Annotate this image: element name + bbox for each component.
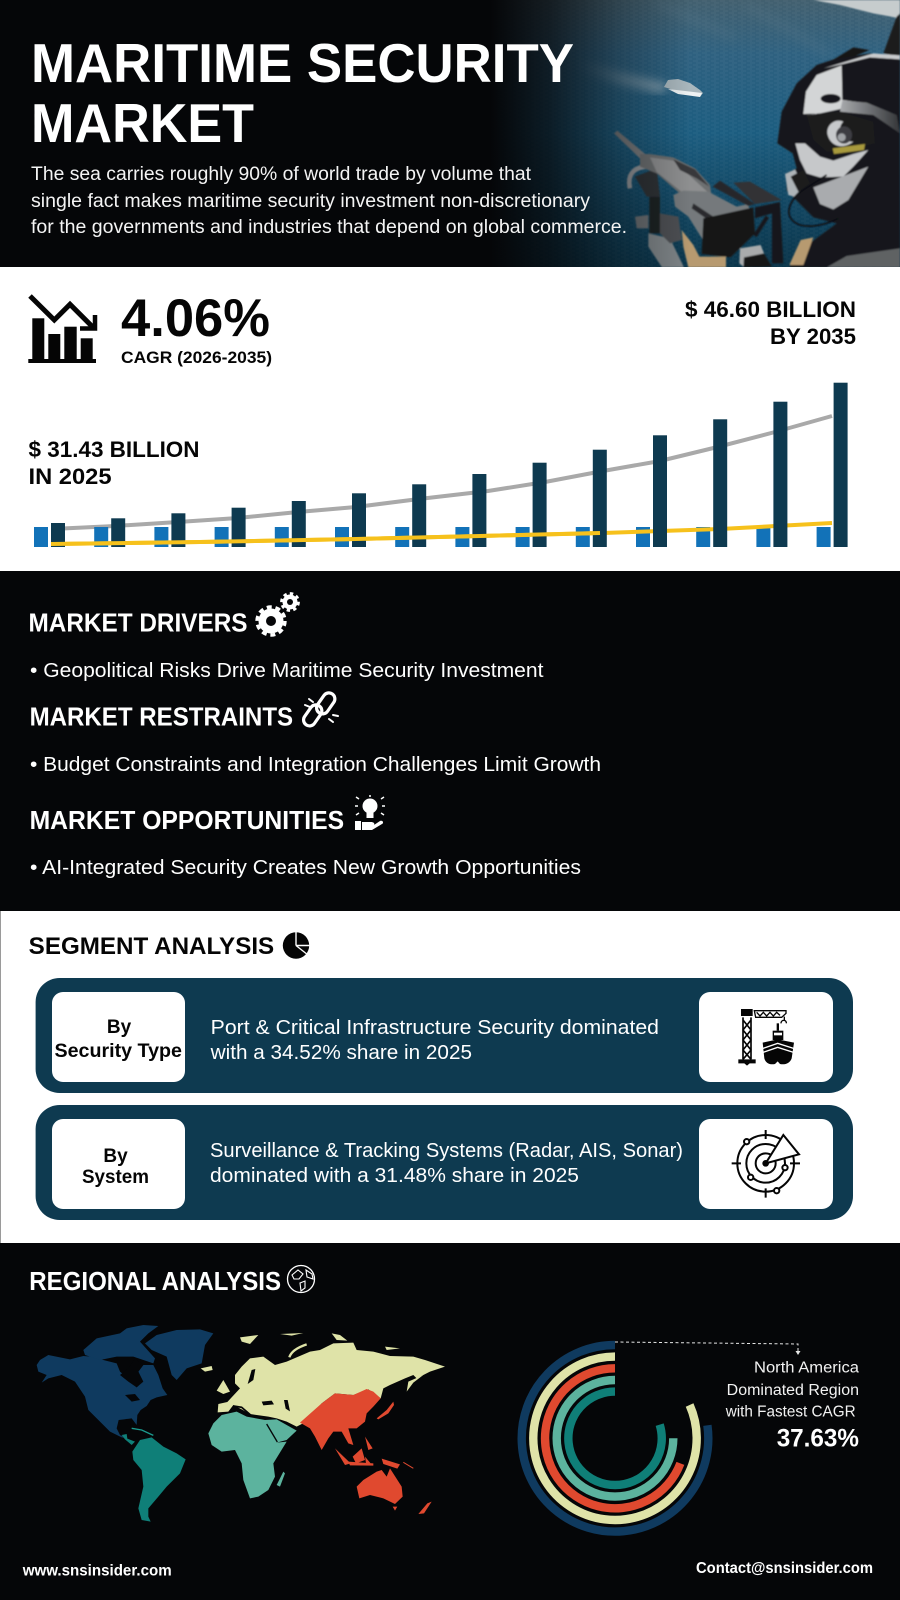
- icon: broken chain: [301, 691, 338, 728]
- icon: pie chart: [283, 931, 311, 959]
- callout: North America: with Fastest CAGR: [725, 1404, 856, 1421]
- callout: North America: Dominated Region: [727, 1382, 859, 1399]
- label box: By: [107, 1017, 132, 1038]
- forecast value: BY 2035: [770, 324, 856, 349]
- segment description: [210, 1017, 659, 1064]
- callout arrow: [615, 1342, 800, 1355]
- panel: market dynamics: [0, 571, 900, 911]
- region: Europe and Russia: [201, 1333, 445, 1427]
- icon box: port crane and ship: [699, 992, 833, 1082]
- intro text: The sea carries roughly 90% of world trade by volume that: [31, 164, 532, 185]
- icon: gears: [257, 594, 298, 635]
- title: MARITIME SECURITY: [31, 32, 574, 94]
- icon: bulb in hand: [355, 795, 385, 830]
- panel: market size chart: [0, 267, 900, 571]
- panel: regional analysis: [0, 1243, 900, 1600]
- heading: market restraints: MARKET RESTRAINTS: [30, 704, 293, 732]
- icon: chart with trend arrow: [28, 296, 96, 363]
- segment description: Port & Critical Infrastructure Security dominated: [211, 1017, 659, 1039]
- website: www.snsinsider.com: [22, 1563, 172, 1580]
- heading: market opportunities: MARKET OPPORTUNITIES: [30, 807, 344, 835]
- card: by security type: [36, 978, 853, 1093]
- base year value: $ 31.43 BILLION: [28, 437, 200, 462]
- forecast value: $ 46.60 BILLION: [685, 297, 856, 322]
- segment description: [210, 1140, 683, 1187]
- segment description: Surveillance & Tracking Systems (Radar, AIS, Sonar): [210, 1140, 683, 1162]
- region: North America: [37, 1325, 213, 1438]
- label box: [52, 1119, 185, 1209]
- driver item: • Geopolitical Risks Drive Maritime Security Investment: [30, 659, 544, 682]
- icon box: radar: [699, 1119, 833, 1209]
- callout: North America: 37.63%: [777, 1425, 859, 1453]
- callout: North America: North America: [754, 1360, 859, 1377]
- helmeted gunner: [777, 13, 900, 267]
- card: by system: [36, 1105, 853, 1220]
- label box: Security Type: [54, 1041, 182, 1062]
- label box: [52, 992, 185, 1082]
- forecast value: [685, 297, 856, 349]
- panel: segment analysis: [0, 911, 900, 1243]
- ship: [664, 79, 703, 97]
- label box: By: [103, 1146, 128, 1167]
- contact: Contact@snsinsider.com: [696, 1560, 873, 1577]
- segment description: with a 34.52% share in 2025: [210, 1042, 472, 1064]
- base year value: [28, 437, 200, 489]
- title: [31, 32, 574, 154]
- panel: header: [0, 0, 900, 267]
- intro text: single fact makes maritime security investment non-discretionary: [31, 191, 591, 212]
- title: MARKET: [31, 92, 254, 154]
- heading: regional analysis: REGIONAL ANALYSIS: [29, 1268, 281, 1296]
- label box: System: [82, 1167, 149, 1188]
- header photo: sea with helicopter gunner: [490, 0, 900, 267]
- radial chart: [522, 1345, 708, 1532]
- restraint item: • Budget Constraints and Integration Challenges Limit Growth: [30, 753, 601, 776]
- intro text: [31, 164, 627, 238]
- region: Asia Pacific: [300, 1389, 432, 1514]
- opportunity item: • AI-Integrated Security Creates New Growth Opportunities: [30, 856, 581, 879]
- bar chart: [34, 383, 848, 547]
- region: Latin America: [122, 1428, 186, 1522]
- intro text: for the governments and industries that depend on global commerce.: [31, 217, 627, 238]
- CAGR label: CAGR (2026-2035): [121, 348, 272, 367]
- icon: globe: [288, 1266, 314, 1292]
- heading: segment analysis: SEGMENT ANALYSIS: [29, 933, 274, 960]
- callout: North America: [725, 1360, 859, 1453]
- CAGR value: 4.06%: [121, 289, 270, 348]
- world map: [37, 1325, 445, 1522]
- region: Middle East and Africa: [208, 1412, 297, 1498]
- segment description: dominated with a 31.48% share in 2025: [210, 1165, 579, 1187]
- base year value: IN 2025: [28, 464, 112, 489]
- heading: market drivers: MARKET DRIVERS: [28, 610, 248, 638]
- machine gun: [614, 131, 783, 267]
